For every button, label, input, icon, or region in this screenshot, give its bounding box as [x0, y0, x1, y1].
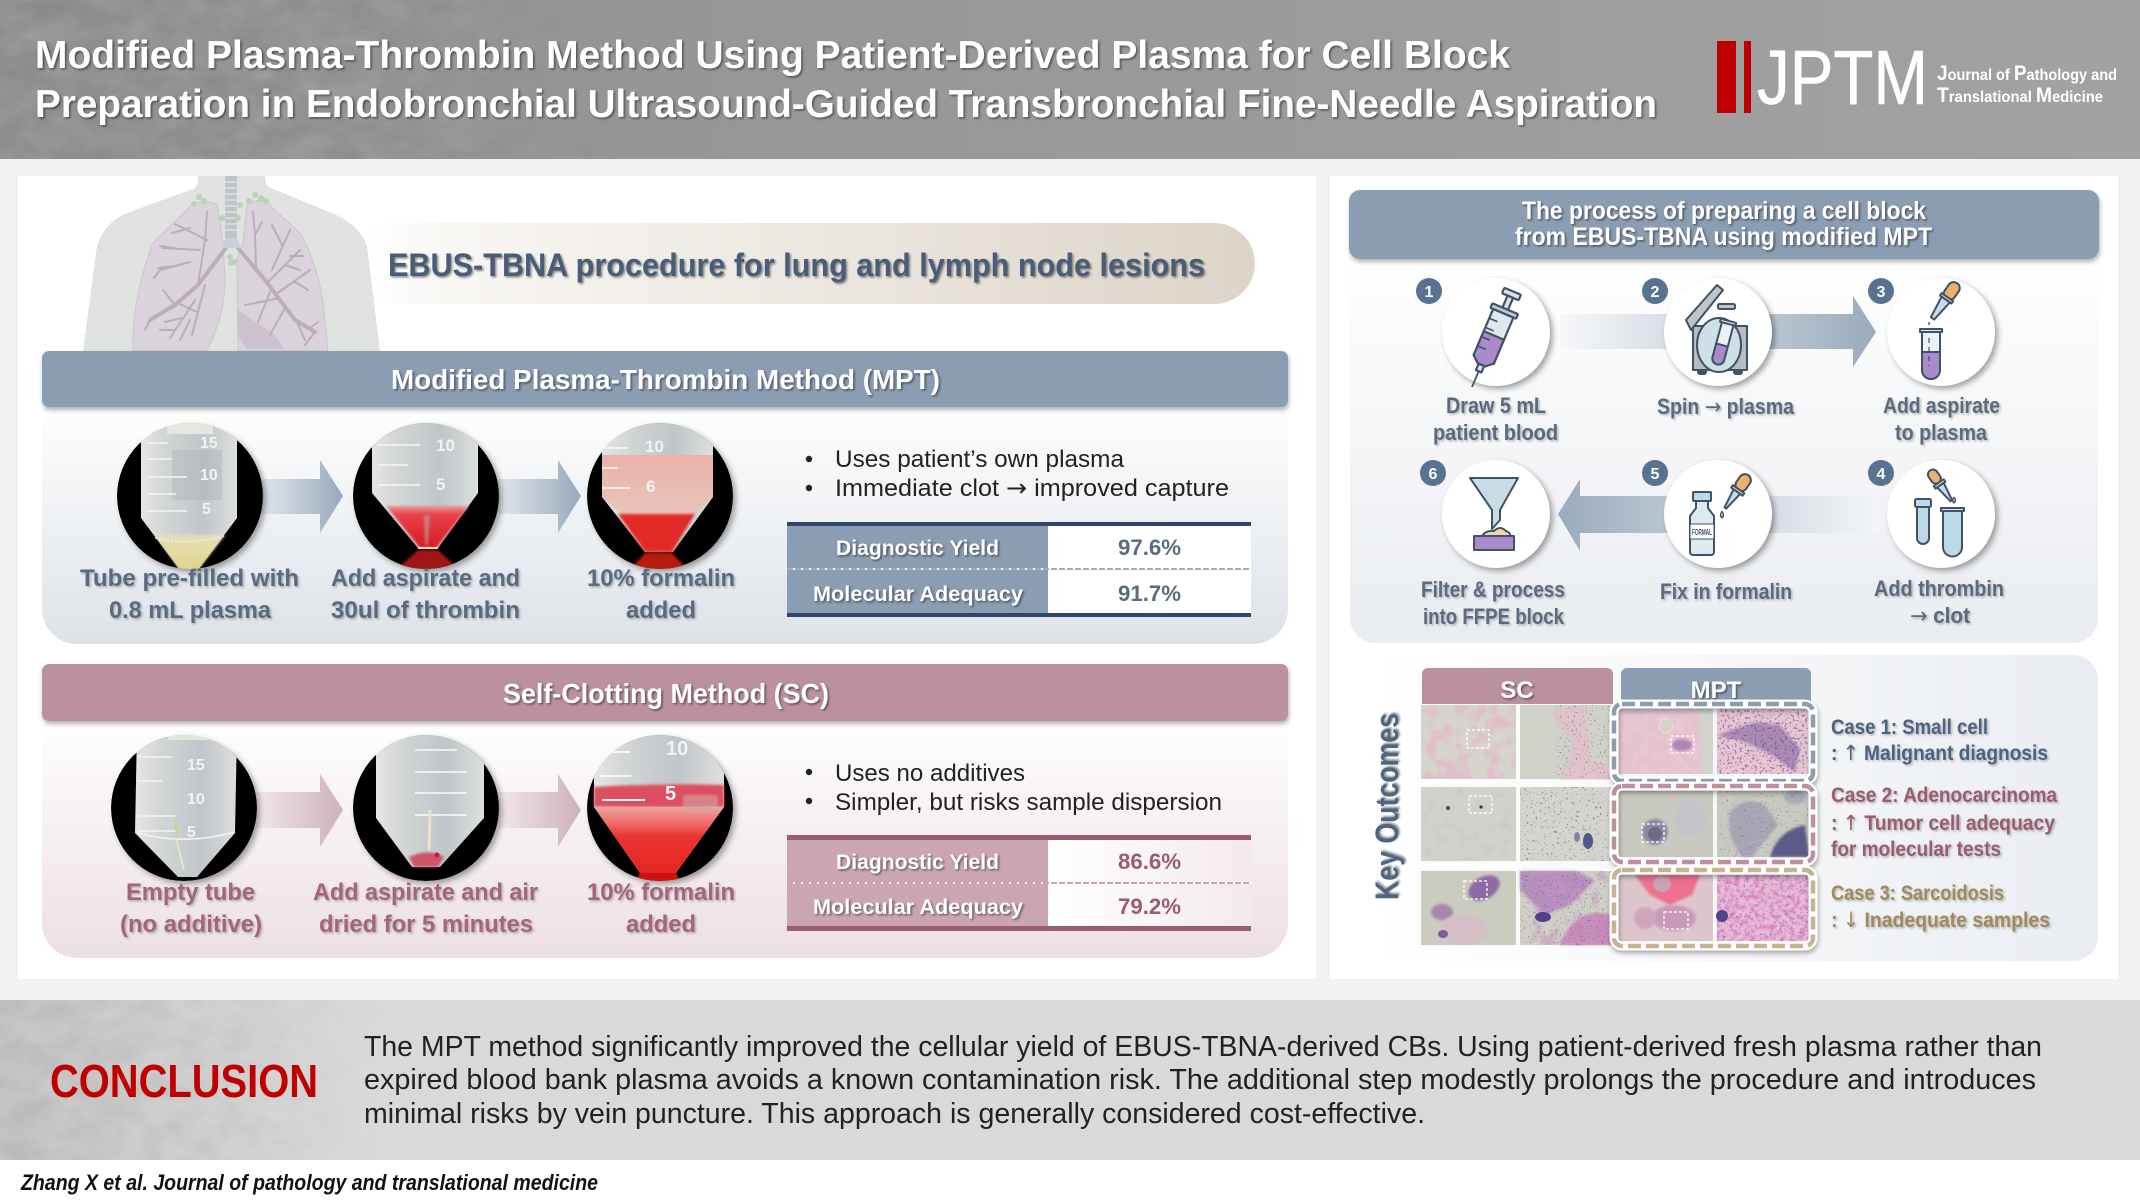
- labels: SC steps: added: [626, 911, 696, 938]
- bullets: MPT: Immediate clot → improved capture: [835, 474, 1229, 502]
- labels: MPT steps: [80, 565, 735, 624]
- panel: left methods: [18, 176, 1316, 979]
- badge: [1416, 278, 1442, 304]
- table: SC results: 86.6%: [1118, 849, 1181, 874]
- arrow: step 4 to 6: [1558, 479, 1880, 551]
- citation footer: [0, 1160, 2140, 1202]
- dashed frame: case 3 MPT: [1614, 870, 1813, 946]
- badge: 2: [1651, 284, 1660, 301]
- photo: aspirate and thrombin: 10: [436, 436, 455, 455]
- tab: SC: SC: [1500, 677, 1534, 704]
- tab: SC: [1422, 668, 1613, 704]
- labels: MPT steps: 30ul of thrombin: [331, 597, 520, 624]
- labels: MPT steps: 0.8 mL plasma: [109, 597, 272, 624]
- table: MPT results: 91.7%: [1118, 581, 1181, 606]
- panel: right process and outcomes: [1330, 176, 2118, 979]
- arrow: [498, 774, 581, 847]
- text: case 2: for molecular tests: [1831, 838, 2001, 861]
- arrow: [262, 460, 343, 533]
- histology: case 3 SC: [1421, 870, 1612, 945]
- illustration: torso and lungs: [83, 176, 380, 351]
- text: case 1: Case 1: Small cell: [1831, 716, 1988, 739]
- badge: [1642, 460, 1668, 486]
- histology: case 3 MPT: [1618, 875, 1809, 941]
- labels: SC steps: dried for 5 minutes: [319, 911, 533, 938]
- tab: MPT: [1621, 668, 1811, 704]
- SC heading bar: Self-Clotting Method (SC): [503, 678, 829, 709]
- SC heading bar: [42, 664, 1288, 721]
- bullets: SC: Uses no additives: [835, 760, 1025, 787]
- step 1: syringe: [1416, 278, 1558, 445]
- panel: conclusion: [0, 1000, 2140, 1160]
- process heading: The process of preparing a cell block: [1522, 197, 1926, 225]
- photo: empty tube: 15: [187, 757, 205, 774]
- banner: EBUS-TBNA: EBUS-TBNA procedure for lung and lymph node lesions: [388, 247, 1205, 283]
- panel: key outcomes: [1369, 655, 2098, 961]
- badge: [1868, 278, 1894, 304]
- tab: MPT: MPT: [1691, 677, 1742, 704]
- header band: [0, 0, 2140, 159]
- histology: case 1 SC: [1421, 705, 1612, 779]
- arrow: [256, 774, 343, 847]
- arrow: step 1 to 3: [1560, 296, 1876, 367]
- arrow: [498, 460, 581, 533]
- badge: [1420, 460, 1446, 486]
- table: SC results: 79.2%: [1118, 894, 1181, 919]
- dashed frame: case 2 MPT: [1614, 786, 1813, 862]
- labels: SC steps: 10% formalin: [587, 879, 735, 906]
- table: MPT results: [787, 522, 1251, 617]
- photo: SC formalin added: [587, 730, 733, 885]
- dashed frame: case 1 MPT: [1614, 704, 1813, 781]
- table: SC results: Diagnostic Yield: [836, 851, 999, 874]
- labels: SC steps: Empty tube: [126, 879, 255, 906]
- step 5: formalin bottle: [1642, 460, 1792, 604]
- process heading: [1349, 190, 2099, 259]
- title: Preparation in Endobronchial Ultrasound-Guided Transbronchial Fine-Needle Aspiration: [35, 83, 1657, 126]
- text: case 2: Case 2: Adenocarcinoma: [1831, 784, 2057, 807]
- histology: case 2 SC: [1421, 787, 1612, 861]
- logo: JPTM: Translational Medicine: [1937, 84, 2103, 107]
- label: [1883, 393, 2000, 445]
- citation footer: Zhang X et al. Journal of pathology and translational medicine: [20, 1170, 598, 1195]
- labels: MPT steps: added: [626, 597, 696, 624]
- photo: empty tube: 10: [187, 791, 205, 808]
- photo: aspirate and thrombin: 5: [436, 475, 445, 494]
- badge: 5: [1651, 466, 1660, 483]
- badge: 3: [1877, 284, 1886, 301]
- photo: aspirate air dried: [353, 730, 499, 881]
- bullets: MPT: [806, 446, 1229, 502]
- panel: SC method: [42, 664, 1288, 958]
- photo: tube pre-filled with plasma: 15: [200, 435, 218, 452]
- text: case 2: [1831, 784, 2057, 861]
- title: Modified Plasma-Thrombin Method Using Patient-Derived Plasma for Cell Block: [35, 34, 1510, 77]
- process heading: from EBUS-TBNA using modified MPT: [1515, 223, 1932, 251]
- table: SC results: Molecular Adequacy: [813, 896, 1023, 919]
- label: [1874, 576, 2004, 629]
- photo: formalin added: 10: [645, 437, 664, 456]
- labels: SC steps: (no additive): [120, 911, 262, 938]
- labels: SC steps: Add aspirate and air: [313, 879, 538, 906]
- photo: formalin added: [587, 420, 733, 574]
- step 5: formalin bottle: FORMAL: [1692, 528, 1712, 537]
- text: case 3: Case 3: Sarcoidosis: [1831, 882, 2004, 905]
- conclusion text: minimal risks by vein puncture. This approach is generally considered cost-effective.: [364, 1098, 1425, 1130]
- label: patient blood: [1433, 420, 1558, 445]
- labels: MPT steps: Add aspirate and: [331, 565, 520, 592]
- badge: 1: [1425, 284, 1434, 301]
- photo: aspirate and thrombin: [353, 420, 499, 572]
- table: MPT results: 97.6%: [1118, 535, 1181, 560]
- table: MPT results: Molecular Adequacy: [813, 583, 1023, 606]
- bullets: MPT: Uses patient’s own plasma: [835, 446, 1125, 473]
- title: [35, 34, 1657, 126]
- label: Fix in formalin: [1660, 579, 1792, 604]
- step 4: thrombin tubes: [1868, 460, 2004, 629]
- labels: MPT steps: 10% formalin: [587, 565, 735, 592]
- histology: case 1 MPT: [1618, 708, 1809, 774]
- banner: EBUS-TBNA: [370, 223, 1255, 304]
- text: case 3: : ↓ Inadequate samples: [1831, 908, 2050, 932]
- photo: empty tube: [111, 730, 257, 881]
- MPT heading bar: [42, 351, 1288, 407]
- text: case 1: [1831, 716, 2048, 765]
- label: Filter & process: [1421, 577, 1565, 602]
- logo: JPTM: JPTM: [1757, 35, 1928, 121]
- photo: formalin added: 6: [646, 477, 655, 496]
- label: to plasma: [1895, 420, 1988, 445]
- label: Draw 5 mL: [1446, 393, 1546, 418]
- badge: [1642, 278, 1668, 304]
- table: MPT results: Diagnostic Yield: [836, 537, 999, 560]
- label: → clot: [1910, 603, 1971, 629]
- step 2: centrifuge: [1642, 278, 1795, 420]
- label: [1421, 577, 1565, 629]
- bullets: SC: Simpler, but risks sample dispersion: [835, 789, 1222, 816]
- badge: 4: [1877, 466, 1886, 483]
- conclusion text: [364, 1031, 2042, 1130]
- histology: case 2 MPT: [1618, 790, 1809, 857]
- photo: tube pre-filled with plasma: [117, 420, 263, 570]
- bullets: SC: [806, 760, 1222, 816]
- table: SC results: [787, 835, 1251, 931]
- photo: tube pre-filled with plasma: 5: [202, 501, 211, 518]
- label: Add thrombin: [1874, 576, 2004, 601]
- label: Spin → plasma: [1657, 394, 1795, 420]
- label: Add aspirate: [1883, 393, 2000, 418]
- logo: JPTM: [1717, 35, 2117, 121]
- label: into FFPE block: [1423, 604, 1565, 629]
- step 3: dropper and tube: [1868, 278, 2000, 445]
- logo: JPTM: Journal of Pathology and: [1937, 62, 2117, 85]
- conclusion heading: CONCLUSION: [50, 1055, 318, 1107]
- labels: MPT steps: Tube pre-filled with: [80, 565, 299, 592]
- photo: empty tube: 5: [187, 824, 196, 841]
- label: [1433, 393, 1558, 445]
- text: case 3: [1831, 882, 2050, 932]
- conclusion text: The MPT method significantly improved the cellular yield of EBUS-TBNA-derived CBs. Using patient-derived fresh plasma rather than: [364, 1031, 2042, 1063]
- step 6: funnel and block: [1420, 460, 1565, 629]
- labels: SC steps: [120, 879, 735, 938]
- text: case 2: : ↑ Tumor cell adequacy: [1831, 811, 2055, 835]
- photo: SC formalin added: 10: [666, 738, 688, 760]
- text: case 1: : ↑ Malignant diagnosis: [1831, 741, 2048, 765]
- badge: 6: [1429, 466, 1438, 483]
- heading: Key Outcomes: Key Outcomes: [1369, 713, 1405, 900]
- MPT heading bar: Modified Plasma-Thrombin Method (MPT): [391, 364, 940, 395]
- photo: SC formalin added: 5: [665, 783, 676, 805]
- conclusion text: expired blood bank plasma avoids a known contamination risk. The additional step modestly prolongs the procedure and introduces: [364, 1064, 2036, 1096]
- panel: MPT method: [42, 351, 1288, 644]
- panel: process steps: [1349, 190, 2099, 643]
- photo: tube pre-filled with plasma: 10: [200, 467, 218, 484]
- badge: [1868, 460, 1894, 486]
